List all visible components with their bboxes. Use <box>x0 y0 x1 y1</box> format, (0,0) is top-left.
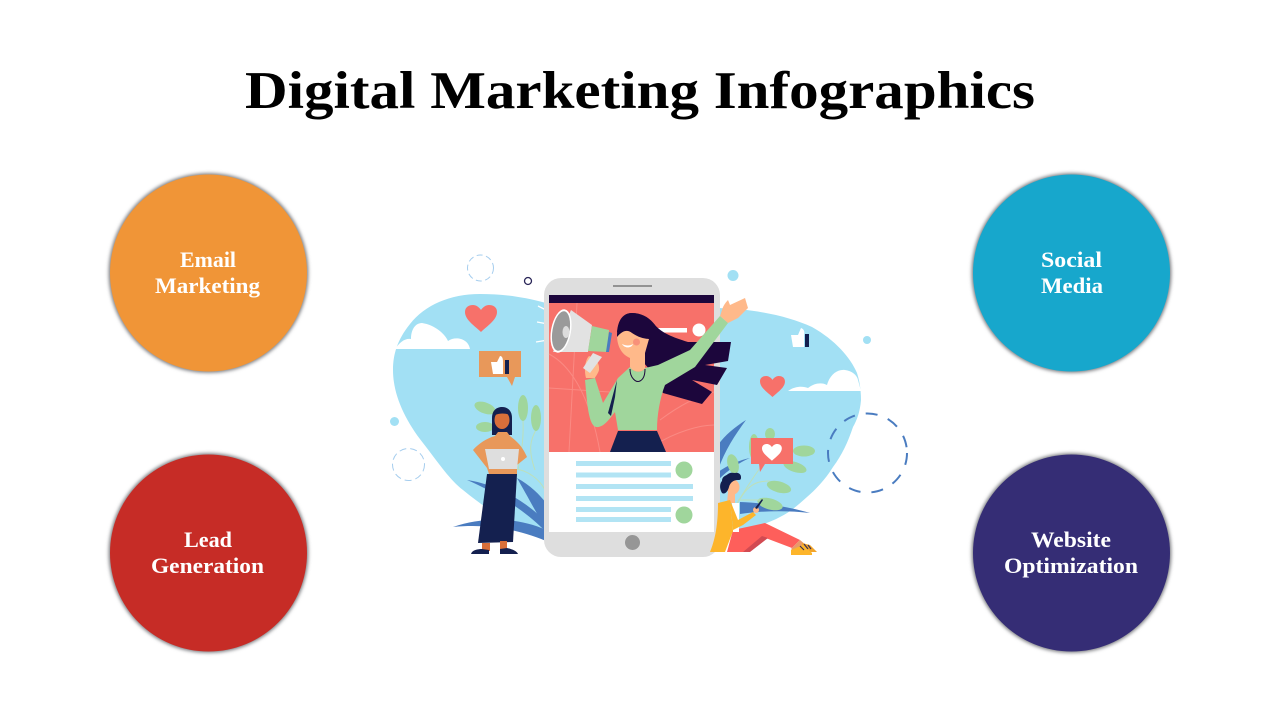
sweater <box>585 316 728 430</box>
hand with handle <box>585 356 599 378</box>
panel: social media: Social <box>1041 247 1102 272</box>
phone list rows <box>576 461 693 524</box>
necklace <box>630 369 645 381</box>
icon: heart right <box>760 376 785 397</box>
blue blob right <box>718 308 861 535</box>
panel: lead generation: Generation <box>151 553 264 578</box>
title: Digital Marketing Infographics <box>245 62 1035 120</box>
megaphone <box>547 308 612 354</box>
panel: website optimization: Optimization <box>1004 553 1138 578</box>
phone <box>544 278 720 557</box>
curly hair <box>720 473 741 494</box>
icon: heart left <box>465 305 497 332</box>
cloud right <box>788 370 861 391</box>
seated man with phone <box>710 473 817 555</box>
heart speech bubble <box>751 438 793 472</box>
cloud left <box>395 323 470 349</box>
neck and face <box>727 492 735 503</box>
woman with laptop <box>471 407 527 554</box>
panel: lead generation: Lead <box>184 527 232 552</box>
panel: email marketing <box>109 173 308 373</box>
raised hand <box>720 298 748 323</box>
sweater fold <box>608 380 617 416</box>
decorative dots and rings <box>390 255 907 492</box>
trousers <box>727 523 800 552</box>
jacket <box>710 500 733 552</box>
panel: email marketing: Email <box>180 247 236 272</box>
icon: thumbs-up right <box>791 328 809 347</box>
icon: thumbs-up bubble <box>479 351 521 386</box>
panel: social media: Media <box>1041 273 1103 298</box>
megaphone sound lines <box>536 306 548 342</box>
central illustration <box>390 255 907 557</box>
plants right <box>718 420 815 514</box>
blue blob left <box>393 294 546 540</box>
panel: social media <box>972 173 1171 373</box>
skirt <box>610 431 666 452</box>
flowing hair <box>617 313 731 404</box>
plants left <box>453 395 546 541</box>
face <box>617 329 649 372</box>
shoes <box>802 543 817 552</box>
panel: lead generation <box>109 453 308 653</box>
woman with megaphone <box>547 298 748 452</box>
panel: website optimization: Website <box>1031 527 1111 552</box>
shirt <box>732 503 739 532</box>
panel: website optimization <box>972 453 1171 653</box>
panel: email marketing: Marketing <box>155 273 260 298</box>
